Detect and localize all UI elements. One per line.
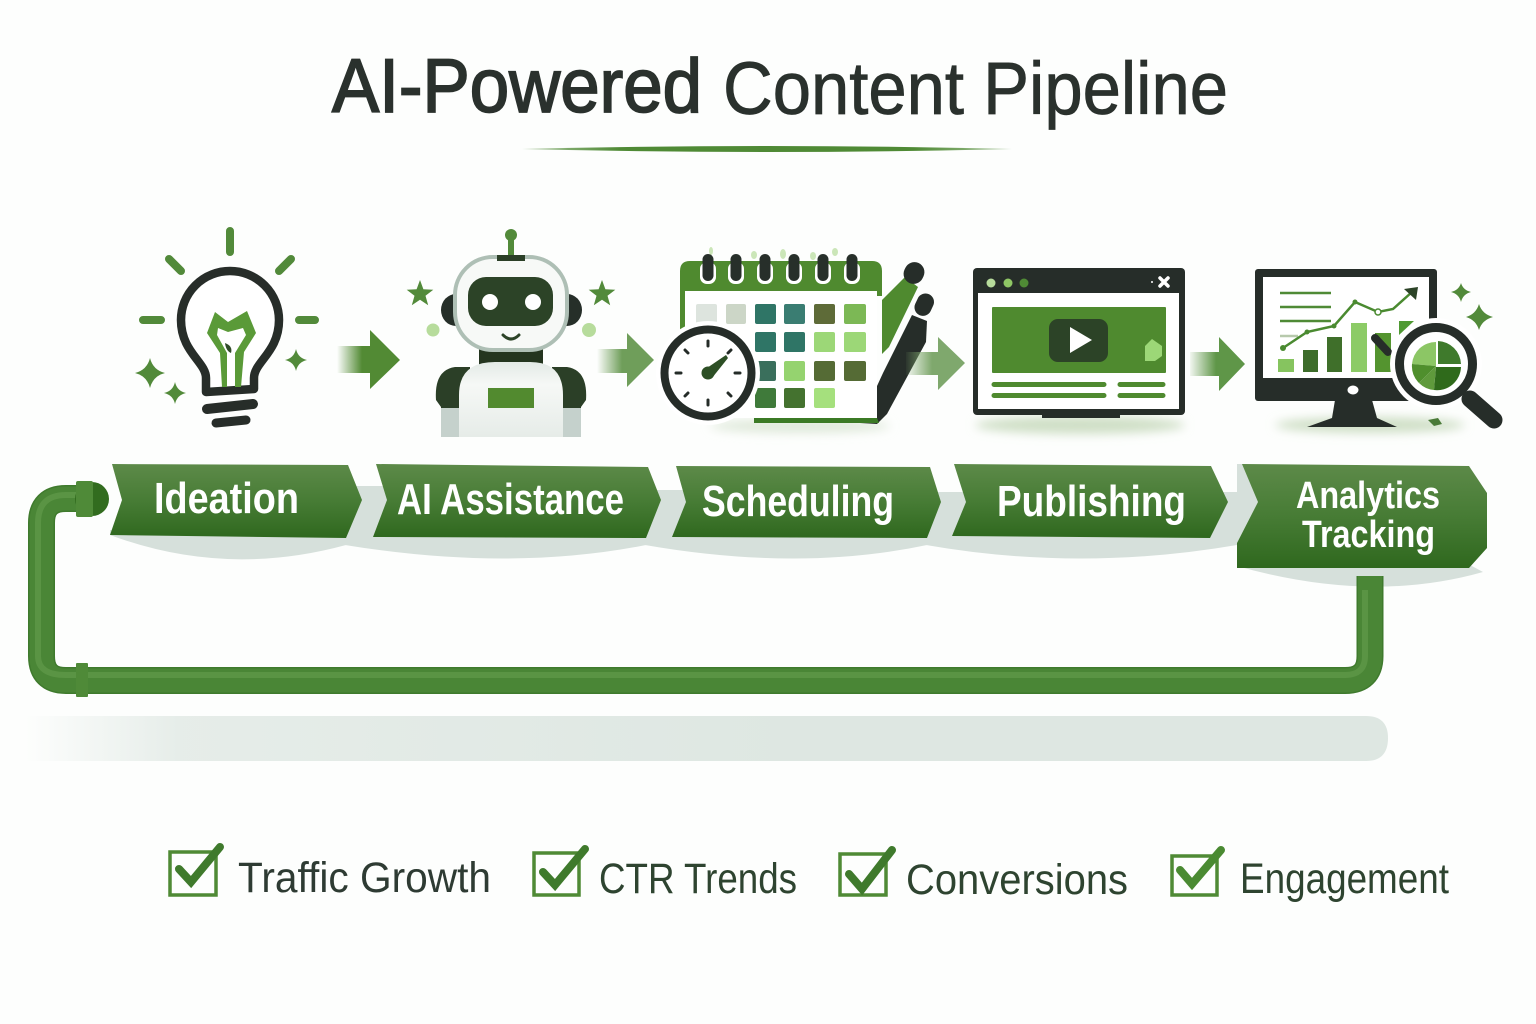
banner: Scheduling (672, 466, 941, 538)
metric: Traffic Growth (170, 847, 491, 902)
metric: Conversions: Conversions (906, 856, 1128, 904)
metric: Traffic Growth: Traffic Growth (238, 854, 491, 902)
title: AI-Powered (332, 44, 702, 129)
title: Content Pipeline (723, 47, 1228, 130)
banner: Ideation (110, 464, 362, 538)
banner: Scheduling: Scheduling (702, 477, 894, 526)
icon: light bulb (135, 231, 315, 423)
metric: Engagement: Engagement (1240, 855, 1449, 903)
icon: analytics monitor with magnifier (1255, 269, 1494, 433)
pipeline ground shadow (25, 716, 1388, 761)
banner: Publishing: Publishing (997, 477, 1186, 526)
title (332, 44, 1228, 130)
banner: Publishing (952, 464, 1228, 538)
title underline (522, 146, 1012, 152)
banner: Analytics Tracking: Tracking (1302, 514, 1435, 556)
banner: Ideation: Ideation (154, 474, 299, 523)
metric: Conversions (840, 850, 1128, 904)
banner: AI Assistance: AI Assistance (397, 475, 624, 524)
metric: CTR Trends (534, 849, 797, 903)
arrow: AI assistance to scheduling (597, 333, 654, 387)
metric: CTR Trends: CTR Trends (599, 855, 797, 903)
banner shadow band (110, 464, 1483, 587)
banner: AI Assistance (373, 464, 661, 538)
icon: calendar with clock and pens (656, 247, 937, 433)
banner: Analytics Tracking: Analytics (1296, 475, 1440, 517)
arrow: ideation to AI assistance (337, 330, 400, 389)
banner: Analytics Tracking (1237, 464, 1487, 568)
pipe end cap (75, 481, 109, 517)
icon: robot (407, 229, 615, 437)
arrow: scheduling to publishing (906, 337, 965, 390)
pipe collar (76, 663, 88, 697)
pipe: feedback loop (38, 495, 1370, 680)
arrow: publishing to analytics (1190, 337, 1245, 391)
metric: Engagement (1172, 850, 1449, 903)
icon: browser window with video (973, 268, 1185, 434)
